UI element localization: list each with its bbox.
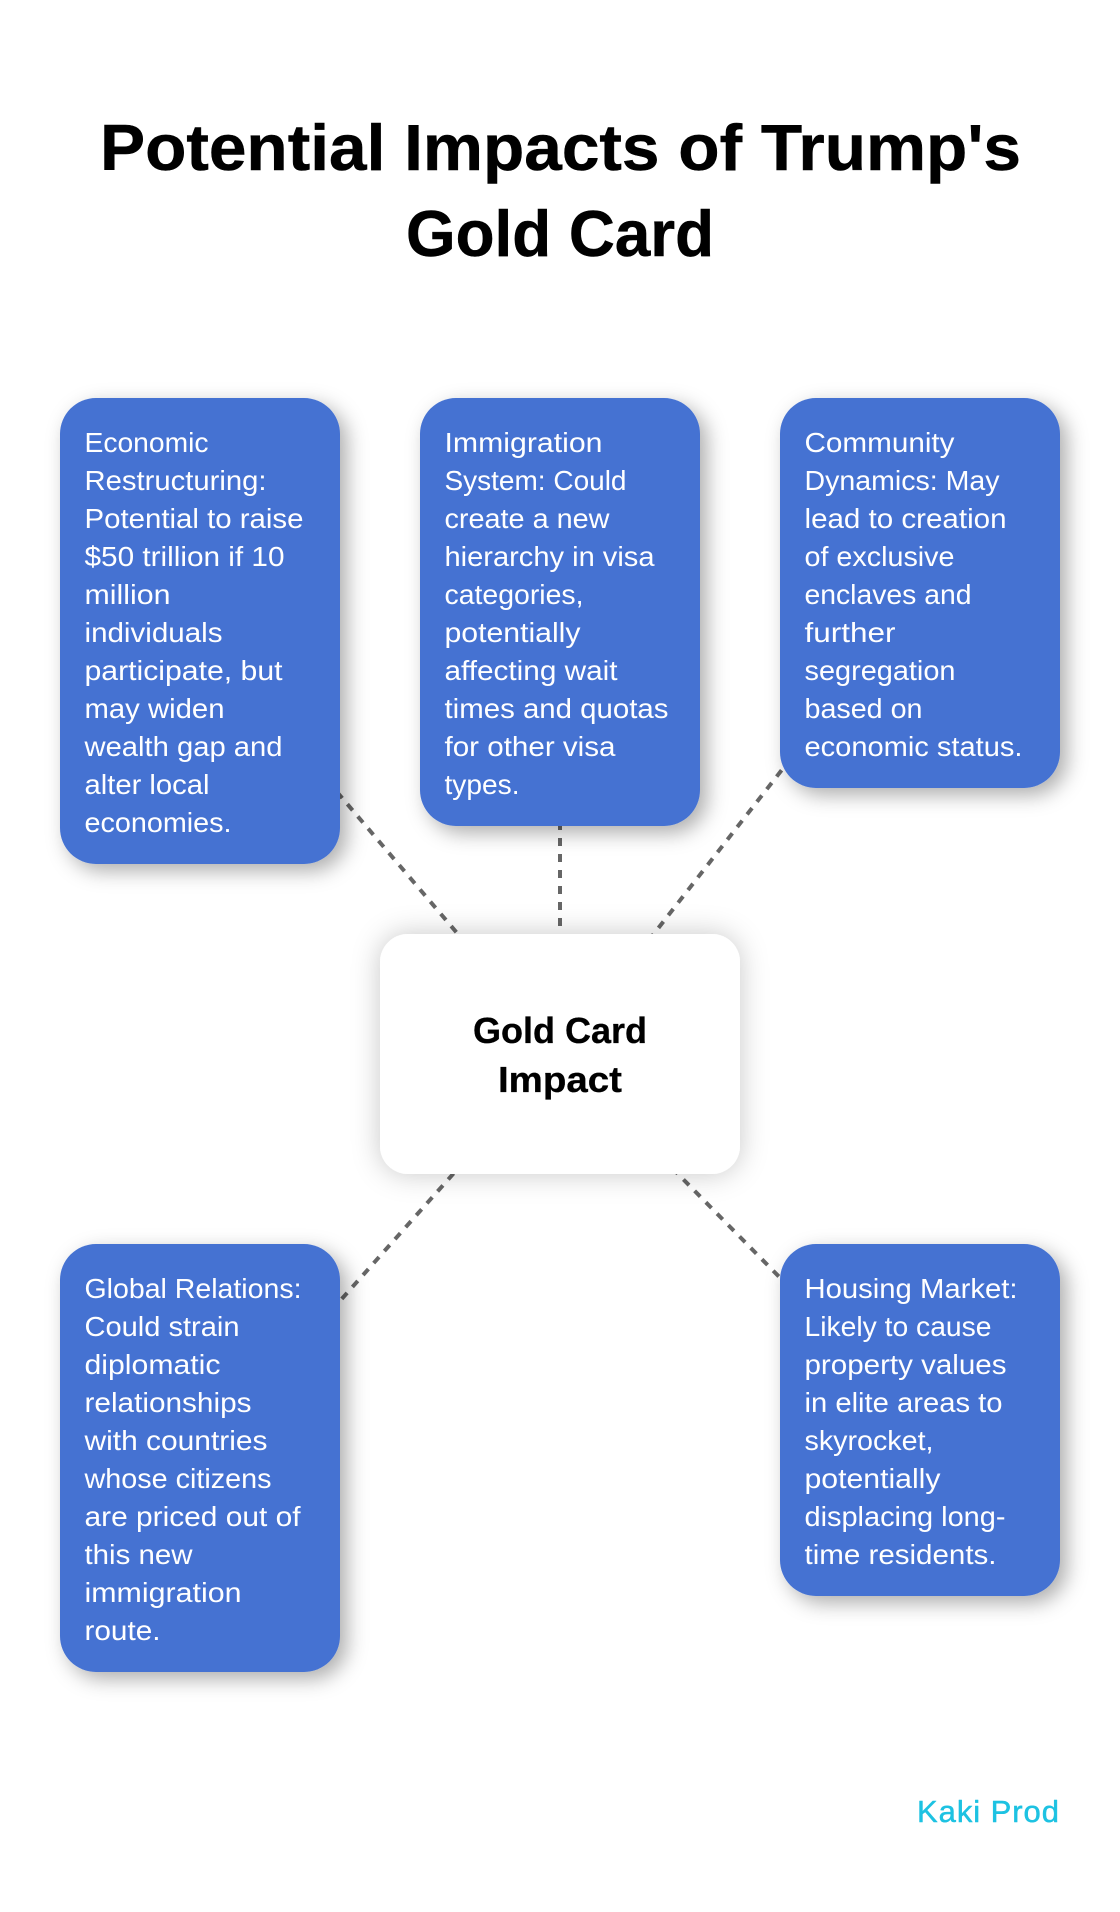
text: global relations: Global Relations: <box>84 1273 302 1304</box>
title: Potential Impacts of Trump's <box>100 111 1021 184</box>
text: housing market: potentially <box>804 1463 940 1494</box>
centre card label <box>473 1010 647 1100</box>
text: economic restructuring: participate, but <box>84 655 283 686</box>
text: global relations: relationships <box>84 1387 252 1418</box>
text: immigration system: categories, <box>444 579 584 610</box>
text: housing market: Likely to cause <box>804 1311 992 1342</box>
text: economic restructuring: alter local <box>84 769 210 800</box>
text: housing market: Housing Market: <box>804 1273 1018 1304</box>
text: immigration system: times and quotas <box>444 693 668 724</box>
title: Gold Card <box>406 197 714 270</box>
panel: housing market <box>780 1244 1060 1596</box>
centre card label: Gold Card <box>473 1010 647 1051</box>
text: economic restructuring: Economic <box>84 427 208 458</box>
text: immigration system: for other visa <box>444 731 616 762</box>
text: housing market: skyrocket, <box>804 1425 934 1456</box>
centre card label: Impact <box>498 1059 622 1100</box>
text: community dynamics: based on <box>804 693 922 724</box>
text: community dynamics: Dynamics: May <box>804 465 1000 496</box>
text: economic restructuring: individuals <box>84 617 222 648</box>
title <box>100 111 1021 270</box>
text: community dynamics: segregation <box>804 655 956 686</box>
text: economic restructuring: wealth gap and <box>83 731 282 762</box>
text: immigration system: Immigration <box>444 427 602 458</box>
text: economic restructuring: economies. <box>84 807 231 838</box>
panel: global relations <box>60 1244 340 1672</box>
panel: immigration system <box>420 398 700 826</box>
text: housing market: in elite areas to <box>804 1387 1002 1418</box>
text: global relations: are priced out of <box>84 1501 301 1532</box>
text: global relations: Could strain <box>84 1311 240 1342</box>
text: housing market: property values <box>804 1349 1006 1380</box>
text: community dynamics: further <box>804 617 896 648</box>
text: global relations: whose citizens <box>83 1463 272 1494</box>
logo: Kaki Prod: Kaki Prod <box>917 1794 1059 1829</box>
text: immigration system: System: Could <box>444 465 626 496</box>
text: immigration system <box>444 427 668 800</box>
panel: community dynamics <box>780 398 1060 788</box>
text: community dynamics: economic status. <box>804 731 1022 762</box>
text: housing market <box>804 1273 1018 1570</box>
text: economic restructuring: Restructuring: <box>84 465 266 496</box>
text: immigration system: types. <box>444 769 520 800</box>
connector lines from the centre card to each surrounding card <box>200 593 920 1458</box>
text: global relations: diplomatic <box>84 1349 220 1380</box>
text: housing market: time residents. <box>804 1539 996 1570</box>
text: economic restructuring: Potential to raise <box>84 503 304 534</box>
text: community dynamics <box>804 427 1022 762</box>
text: global relations: immigration <box>84 1577 242 1608</box>
text: global relations: with countries <box>83 1425 268 1456</box>
text: immigration system: hierarchy in visa <box>444 541 655 572</box>
text: global relations: this new <box>84 1539 193 1570</box>
text: immigration system: potentially <box>444 617 580 648</box>
text: community dynamics: enclaves and <box>804 579 972 610</box>
text: global relations <box>83 1273 302 1646</box>
text: global relations: route. <box>84 1615 160 1646</box>
text: community dynamics: Community <box>804 427 954 458</box>
text: economic restructuring: may widen <box>84 693 224 724</box>
text: economic restructuring: million <box>84 579 170 610</box>
text: immigration system: create a new <box>444 503 610 534</box>
panel: centre card <box>380 934 740 1174</box>
text: immigration system: affecting wait <box>444 655 618 686</box>
text: community dynamics: of exclusive <box>804 541 954 572</box>
panel: economic restructuring <box>60 398 340 864</box>
text: community dynamics: lead to creation <box>804 503 1006 534</box>
text: economic restructuring: $50 trillion if 10 <box>84 541 284 572</box>
text: housing market: displacing long- <box>804 1501 1006 1532</box>
text: economic restructuring <box>83 427 304 838</box>
